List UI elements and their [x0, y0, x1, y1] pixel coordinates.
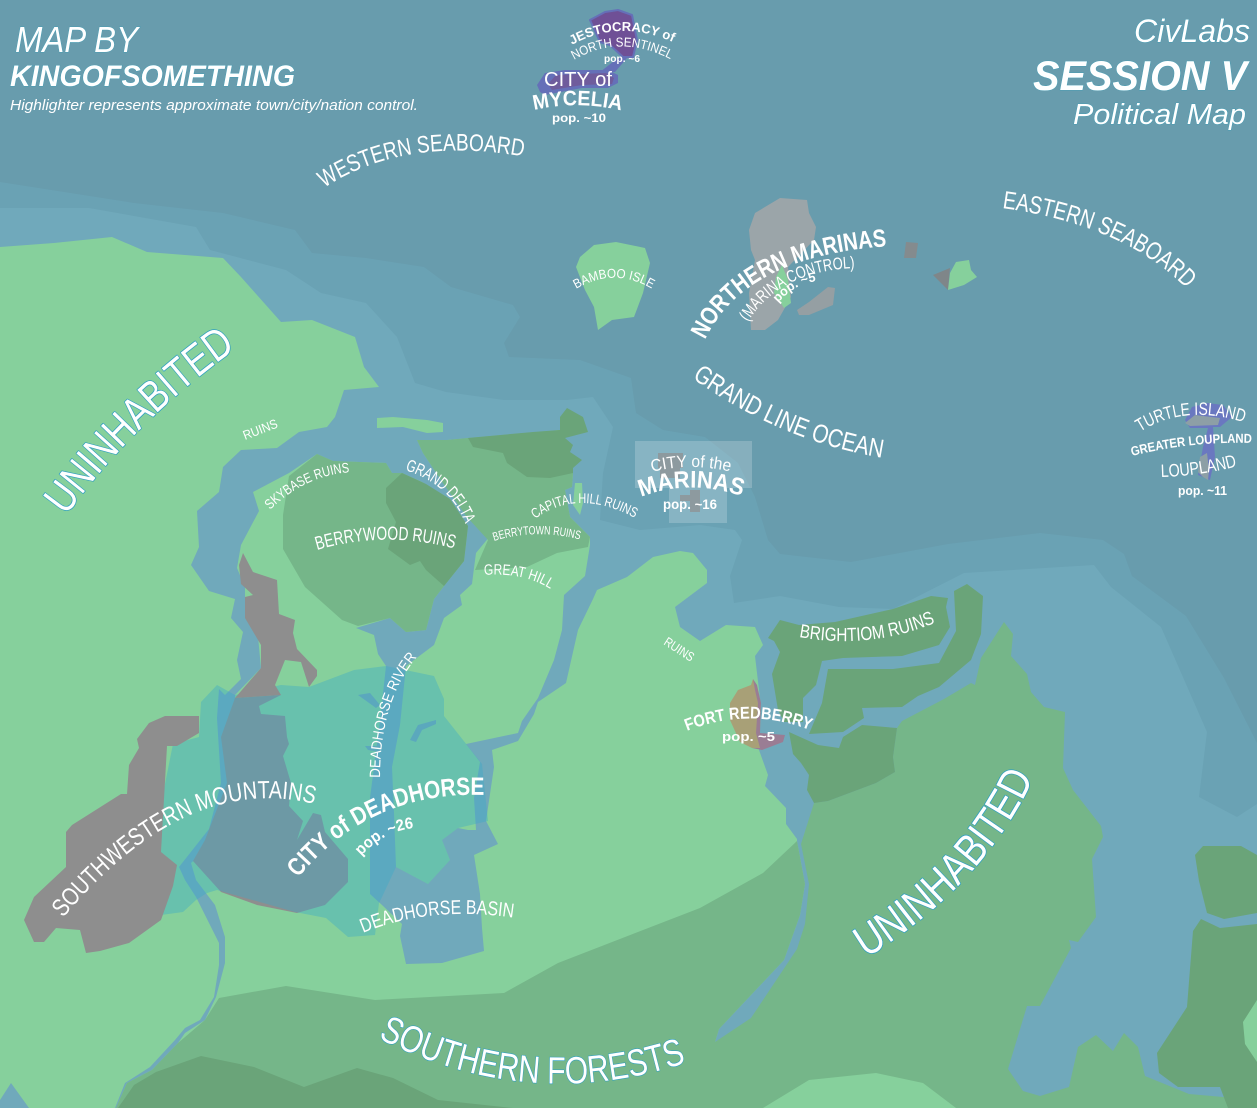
Fort Redberry highlight [730, 679, 760, 748]
label: City of the Marinas: pop. ~16 [663, 496, 717, 512]
Great Hill land [392, 430, 590, 884]
credit: author name: KINGOFSOMETHING [10, 60, 295, 93]
title block [1033, 13, 1250, 131]
label: City of Mycelia: pop. ~10 [552, 111, 606, 125]
southwestern mountains [24, 716, 199, 953]
Capital Hill deep forest [468, 408, 588, 478]
label: Turtle Island and Loupland [1131, 402, 1252, 498]
label: Brightiom Ruins: BRIGHTIOM RUINS [800, 612, 934, 642]
southeast glade [763, 1073, 956, 1108]
label: Northern Marinas: (MARINA CONTROL) [739, 256, 854, 322]
label: Fort Redberry [684, 706, 814, 744]
title block: CivLabs [1134, 13, 1250, 49]
label: Great Hill: GREAT HILL [484, 564, 552, 589]
label: Fort Redberry: FORT REDBERRY [684, 706, 814, 730]
label: Ruins northwest: RUINS [241, 416, 280, 443]
label: Jestocracy of North Sentinel: JESTOCRACY of [570, 22, 676, 44]
highlighter: North Sentinel [590, 10, 637, 57]
eastern forest [715, 622, 1257, 1108]
label: City of Mycelia: CITY of [544, 69, 612, 91]
label: Turtle Island and Loupland: LOUPLAND [1162, 456, 1236, 477]
title block: SESSION V [1033, 52, 1250, 99]
Turtle Island highlight [1185, 403, 1232, 480]
northern mountain range [235, 553, 317, 698]
label: Western Seaboard: WESTERN SEABOARD [316, 134, 524, 186]
highlighter: Deadhorse control [161, 666, 488, 937]
label: Uninhabited west: UNINHABITED [42, 329, 231, 511]
eastern islet green part [948, 260, 977, 290]
Brightiom forest south [789, 725, 897, 803]
highlighter: link between Mycelia and North Sentinel [600, 58, 627, 72]
central mountain [193, 695, 348, 913]
label: City of Deadhorse: CITY of DEADHORSE [288, 778, 484, 874]
label: Uninhabited east: UNINHABITED [852, 769, 1030, 954]
label: Southwestern Mountains: SOUTHWESTERN MOUNTAINS [52, 781, 316, 916]
southeast green corner [1243, 1000, 1257, 1062]
label: Turtle Island and Loupland: TURTLE ISLAND [1134, 402, 1246, 430]
Brightiom forest east [809, 584, 983, 734]
deep southern forest [118, 1056, 513, 1108]
label: City of the Marinas [637, 455, 744, 512]
Deadhorse ponds [358, 693, 436, 752]
label: Skybase Ruins: SKYBASE RUINS [264, 462, 349, 508]
label: Ruins near the fort: RUINS [661, 634, 697, 665]
label: Grand Delta: GRAND DELTA [407, 460, 475, 524]
credit: map by: MAP BY [15, 19, 141, 60]
eastern islet grey part [933, 268, 950, 290]
label: Berrywood Ruins: BERRYWOOD RUINS [314, 526, 456, 550]
label: City of Deadhorse: pop. ~26 [356, 818, 413, 858]
Northern Marinas southern islet [797, 287, 835, 315]
western land [0, 237, 379, 1108]
Loupland land [1198, 453, 1209, 480]
Bamboo Isle [576, 242, 650, 330]
islet north of the delta [377, 417, 443, 433]
label: Capital Hill Ruins: CAPITAL HILL RUINS [532, 493, 638, 518]
label: City of the Marinas: CITY of the [651, 455, 730, 471]
Fort Redberry highlight fringe [752, 679, 785, 750]
title block: Political Map [1073, 99, 1246, 131]
label: Southern Forests: SOUTHERN FORESTS [381, 1016, 684, 1084]
label: Turtle Island and Loupland: pop. ~11 [1178, 483, 1227, 498]
label: Deadhorse Basin: DEADHORSE BASIN [359, 900, 514, 932]
highlighter: Mycelia core [548, 73, 614, 90]
label: Turtle Island and Loupland: GREATER LOUPLAND [1131, 434, 1252, 456]
label: Jestocracy of North Sentinel: pop. ~6 [604, 54, 640, 65]
Turtle Island land [1185, 415, 1220, 426]
label: Fort Redberry: pop. ~5 [722, 729, 775, 744]
label: Grand Line Ocean: GRAND LINE OCEAN [696, 366, 884, 458]
southeast deep forest upper [1195, 846, 1257, 919]
note about the highlighter: Highlighter represents approximate town/city/nation control. [10, 97, 418, 114]
Berrywood deep forest [386, 473, 468, 586]
label: Northern Marinas: pop. ~5 [774, 272, 816, 304]
label: City of the Marinas: MARINAS [637, 471, 744, 496]
label: Deadhorse River: DEADHORSE RIVER [370, 652, 416, 777]
label: City of Mycelia [532, 69, 621, 125]
grey islet [904, 242, 918, 258]
Marinas highlight [635, 441, 752, 523]
label: Northern Marinas: NORTHERN MARINAS [690, 229, 886, 339]
highlighter: Mycelia fringe [537, 70, 618, 95]
small island by Capital Hill [573, 483, 583, 515]
Capital Hill forest [417, 430, 590, 570]
label: Eastern Seaboard: EASTERN SEABOARD [1004, 191, 1195, 285]
label: Berrytown Ruins: BERRYTOWN RUINS [492, 526, 581, 541]
label: Bamboo Isle: BAMBOO ISLE [572, 268, 656, 288]
label: City of Mycelia: MYCELIA [532, 90, 621, 110]
Marinas city blocks [658, 453, 700, 512]
Brightiom forest north [768, 596, 950, 722]
label: Jestocracy of North Sentinel: NORTH SENTINEL [570, 38, 670, 60]
Northern Marinas main island [749, 198, 816, 330]
Berrywood forest [283, 454, 468, 632]
southeast deep forest lower [1157, 919, 1257, 1108]
central and southern land [116, 454, 805, 1108]
label: Jestocracy of North Sentinel [570, 22, 676, 65]
southern forests [116, 841, 805, 1108]
Northern Marinas green strip [774, 265, 791, 308]
